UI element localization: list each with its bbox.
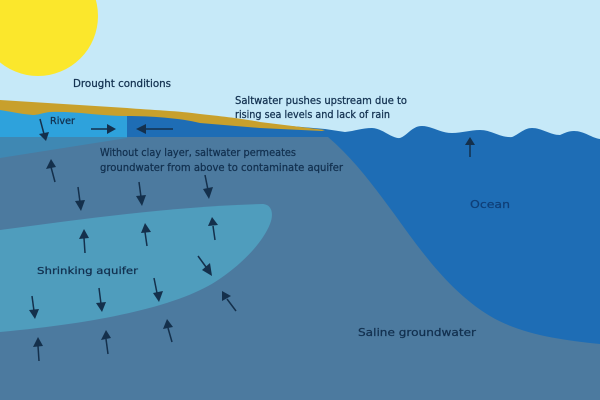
arrow: down 1 xyxy=(75,187,85,211)
arrow: river down xyxy=(39,119,49,141)
label: saline groundwater: Saline groundwater xyxy=(358,327,477,339)
label: drought conditions: Drought conditions xyxy=(73,78,171,90)
icon: sun xyxy=(0,0,98,76)
river xyxy=(0,105,127,137)
ground strip xyxy=(0,100,325,131)
label: saltwater pushes upstream: Saltwater pushes upstream due to xyxy=(235,95,407,107)
label: river: River xyxy=(50,116,75,127)
label: ocean: Ocean xyxy=(470,199,510,211)
arrows xyxy=(29,119,475,361)
arrow: lower right diagonal xyxy=(222,291,236,311)
arrow: river right xyxy=(91,124,116,134)
arrow: up near river xyxy=(46,159,56,182)
arrow: lower up 2 xyxy=(101,330,111,354)
arrow: aquifer diagonal xyxy=(198,256,212,276)
arrow: aquifer down 3 xyxy=(153,278,163,302)
arrow: down 2 xyxy=(136,182,146,206)
label: without clay layer: groundwater from above to contaminate aquifer xyxy=(100,162,344,174)
arrow: aquifer up 3 xyxy=(208,217,218,240)
arrow: ocean up xyxy=(465,137,475,157)
arrow: aquifer down 2 xyxy=(96,288,106,312)
label: saltwater pushes upstream: rising sea levels and lack of rain xyxy=(235,109,390,121)
shrinking aquifer xyxy=(0,204,272,332)
label: without clay layer: Without clay layer, saltwater permeates xyxy=(100,147,296,159)
arrow: saltwater left xyxy=(136,124,173,134)
ocean water xyxy=(127,112,600,344)
permeable layer below river xyxy=(0,136,127,158)
saline groundwater ground body xyxy=(0,137,600,400)
arrow: aquifer up 1 xyxy=(79,229,89,253)
label: shrinking aquifer: Shrinking aquifer xyxy=(37,266,139,277)
arrow: aquifer up 2 xyxy=(141,223,151,246)
arrow: aquifer down 1 xyxy=(29,296,39,319)
arrow: down 3 xyxy=(203,175,213,199)
arrow: lower up 3 xyxy=(163,319,173,342)
arrow: lower up 1 xyxy=(33,337,43,361)
